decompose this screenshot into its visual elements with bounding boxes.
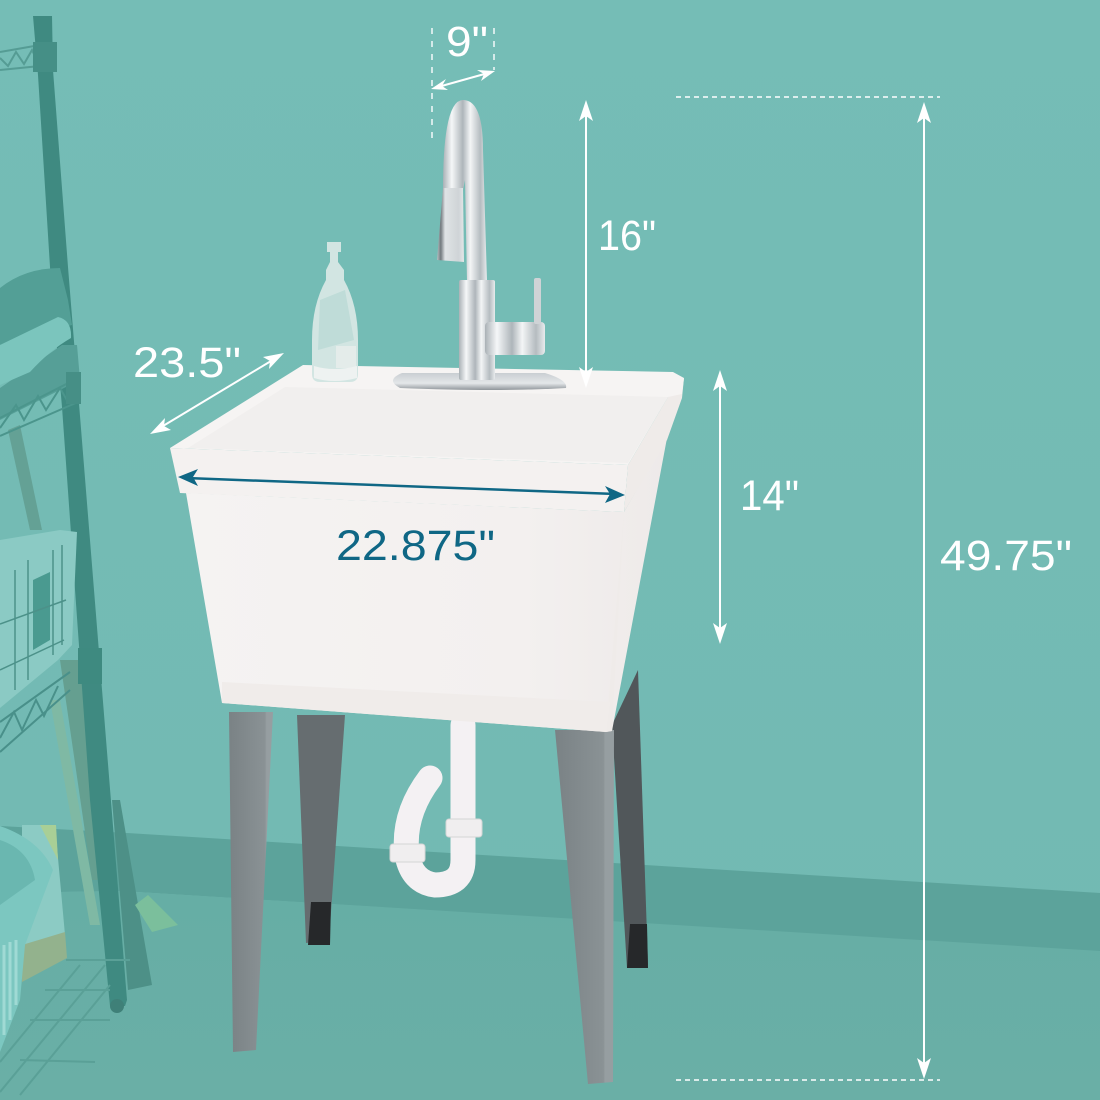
dimension: depth 23.5 in: [133, 339, 284, 434]
dimension: faucet height 16 in: 16": [598, 212, 656, 260]
dimension: basin depth 14 in: 14": [740, 472, 799, 520]
wire shelf at left: [0, 16, 178, 1095]
sink: inner basin: [188, 387, 668, 463]
front legs: [229, 712, 614, 1084]
dimension: total height 49.75 in: [676, 97, 1072, 1080]
faucet: handle: [485, 322, 545, 355]
shelf: towel stack: [0, 268, 80, 420]
shelf: top rail: [0, 42, 57, 72]
back legs: [297, 670, 648, 968]
dimension: faucet reach 9 in: [431, 18, 495, 145]
faucet: body: [459, 280, 495, 380]
shelf: third rail: [0, 648, 102, 752]
shelf: broom handles: [8, 425, 178, 990]
faucet: lever: [534, 278, 541, 324]
sink: bottom band: [222, 682, 610, 732]
leg brackets: [308, 902, 648, 968]
sink: right side panel: [606, 378, 684, 732]
background: baseboard: [0, 826, 1100, 952]
shelf: bottom wire deck: [0, 960, 130, 1095]
dimension: width 22.875 in: 22.875": [336, 522, 495, 570]
sink: front rim: [170, 448, 628, 512]
dimension: faucet reach 9 in: 9": [446, 18, 488, 66]
dimension: faucet height 16 in: [579, 100, 656, 388]
faucet: deck plate: [393, 373, 566, 390]
sink: front body: [186, 438, 667, 732]
shelf: wire basket: [0, 530, 77, 708]
sink: deck: [170, 365, 684, 465]
shelf: second rail: [0, 372, 81, 436]
sink basin: [170, 365, 684, 732]
faucet: gooseneck: [443, 100, 487, 281]
shelf: cardboard box: [22, 825, 67, 982]
dimension: depth 23.5 in: 23.5": [133, 339, 241, 387]
shelf: upright post: [33, 16, 127, 1006]
dimension: total height 49.75 in: 49.75": [940, 532, 1072, 580]
soap bottle: [312, 242, 358, 382]
shelf: laundry basket: [0, 826, 53, 1052]
background: floor: [0, 891, 1100, 1100]
dimension: basin depth 14 in: [713, 370, 799, 644]
dimension: width 22.875 in: [178, 469, 625, 570]
faucet: [393, 100, 566, 390]
faucet: spray head: [437, 188, 464, 262]
drain pipe: [390, 725, 482, 885]
